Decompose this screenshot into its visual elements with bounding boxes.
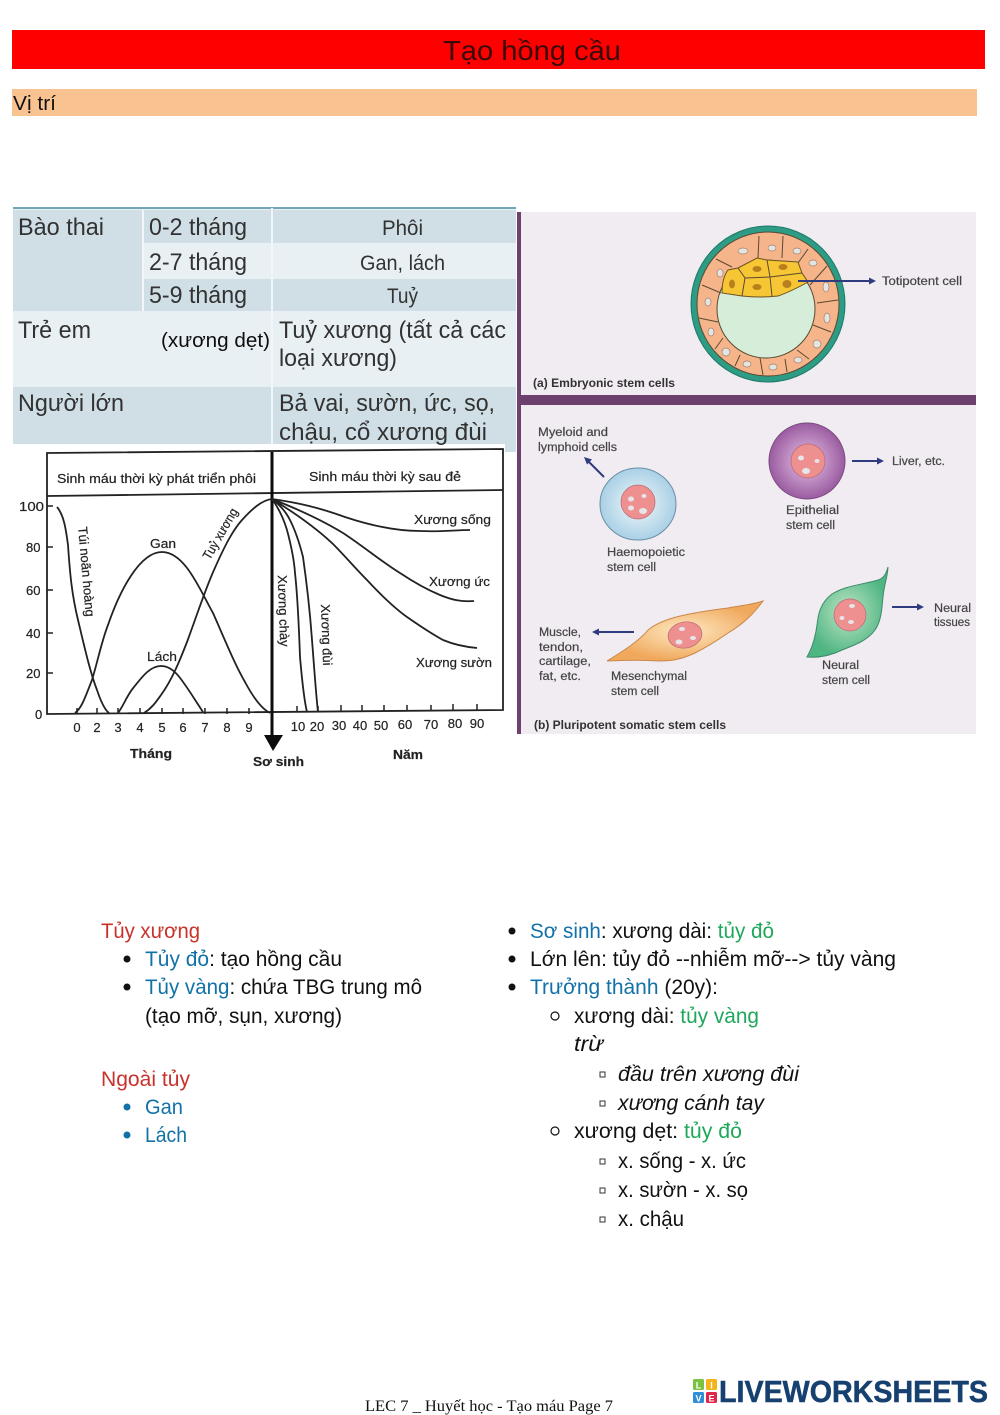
axis titles — [130, 746, 423, 769]
cell: haemopoietic: stem cell — [607, 562, 656, 574]
curve labels: Xương sống — [414, 512, 491, 527]
x axis ticks and labels: 0 — [73, 720, 81, 735]
x axis ticks and labels: 70 — [424, 717, 438, 732]
chart period headers: Sinh máu thời kỳ sau đẻ — [309, 469, 461, 484]
arrow: myeloid and lymphoid cells: Myeloid and — [538, 427, 608, 439]
notes: left column: Ngoài tủy — [101, 1068, 190, 1091]
caption a: (a) Embryonic stem cells — [533, 378, 675, 390]
x axis ticks and labels: 7 — [201, 720, 209, 735]
notes: right column: x. chậu — [618, 1208, 684, 1231]
x axis ticks and labels — [73, 704, 484, 735]
arrow: muscle, tendon, cartilage, fat — [539, 627, 634, 683]
x axis ticks and labels: 40 — [353, 718, 367, 733]
arrow: muscle, tendon, cartilage, fat: tendon, — [539, 642, 583, 654]
curve labels: Lách — [147, 649, 177, 664]
notes: right column: x. sườn - x. sọ — [618, 1179, 748, 1202]
table: blood formation sites by age: Người lớn — [18, 390, 124, 417]
cell: neural: Neural — [822, 660, 859, 672]
notes: left column: Tủy đỏ: tạo hồng cầu — [145, 948, 342, 971]
y axis ticks and labels: 100 — [19, 499, 44, 514]
x axis ticks and labels: 2 — [93, 720, 101, 735]
title bar — [12, 30, 985, 69]
notes: left column: Lách — [145, 1124, 187, 1147]
notes: right column: Lớn lên: tủy đỏ --nhiễm mỡ--> tủy vàng — [530, 948, 896, 971]
logo: liveworksheets: V — [695, 1394, 702, 1404]
chart period headers: Sinh máu thời kỳ phát triển phôi — [57, 471, 256, 486]
x axis ticks and labels: 5 — [158, 720, 166, 735]
diagram: embryonic blastocyst — [691, 226, 845, 382]
curve labels — [75, 505, 492, 670]
y axis ticks and labels: 80 — [26, 540, 40, 555]
section heading: Vị trí — [12, 89, 977, 116]
x axis ticks and labels: 90 — [470, 716, 484, 731]
x axis ticks and labels: 6 — [179, 720, 187, 735]
curve labels: Xương sườn — [416, 655, 492, 670]
curve labels: Tuỷ xương — [199, 505, 241, 562]
y axis ticks and labels: 60 — [26, 583, 40, 598]
cell: haemopoietic — [600, 468, 685, 574]
axis titles: Năm — [393, 747, 423, 762]
curves — [57, 499, 477, 713]
notes: right column: Sơ sinh: xương dài: tủy đỏ — [530, 920, 774, 943]
cell: epithelial: stem cell — [786, 520, 835, 532]
x axis ticks and labels: 50 — [374, 718, 388, 733]
notes: right column: xương dẹt: tủy đỏ — [574, 1120, 742, 1143]
y axis ticks and labels: 40 — [26, 626, 40, 641]
arrow: neural tissues: Neural — [934, 603, 971, 615]
line chart: haematopoiesis over development — [19, 449, 503, 769]
y axis ticks and labels — [19, 499, 53, 722]
notes: right column — [508, 920, 896, 1231]
arrow: muscle, tendon, cartilage, fat: fat, etc. — [539, 671, 581, 683]
notes: left column: Tủy xương — [101, 920, 200, 943]
table: blood formation sites by age: loại xương) — [279, 345, 397, 372]
y axis ticks and labels: 20 — [26, 666, 40, 681]
notes: left column — [101, 920, 422, 1147]
arrow: neural tissues: tissues — [934, 617, 970, 629]
arrow: totipotent cell — [798, 276, 962, 288]
footer text: LEC 7 _ Huyết học - Tạo máu Page 7 — [365, 1398, 613, 1415]
notes: right column: xương dài: tủy vàng — [574, 1005, 759, 1028]
table: blood formation sites by age: 5-9 tháng — [149, 282, 247, 309]
panel: stem cell diagrams — [517, 212, 976, 734]
table: blood formation sites by age: chậu, cổ xương đùi — [279, 419, 487, 446]
notes: right column: đầu trên xương đùi — [618, 1063, 800, 1086]
x axis ticks and labels: 60 — [398, 717, 412, 732]
table: blood formation sites by age: Bả vai, sườn, ức, sọ, — [279, 390, 495, 417]
x axis ticks and labels: 10 — [291, 719, 305, 734]
x axis ticks and labels: 20 — [310, 719, 324, 734]
table: blood formation sites by age: Phôi — [382, 217, 423, 240]
curve labels: Xương đùi — [318, 604, 335, 666]
x axis ticks and labels: 3 — [114, 720, 122, 735]
table: blood formation sites by age: Tuỷ — [387, 285, 418, 308]
x axis ticks and labels: 8 — [223, 720, 231, 735]
arrow: neural tissues — [892, 603, 971, 629]
table: blood formation sites by age: (xương dẹt) — [161, 330, 270, 352]
curve labels: Xương ức — [429, 574, 491, 589]
cell: mesenchymal: Mesenchymal — [611, 671, 687, 683]
y axis ticks and labels: 0 — [35, 707, 42, 722]
notes: right column: x. sống - x. ức — [618, 1150, 746, 1173]
arrow: liver: Liver, etc. — [892, 456, 945, 468]
arrow: myeloid and lymphoid cells: lymphoid cells — [538, 442, 617, 454]
arrow: myeloid and lymphoid cells — [538, 427, 617, 477]
table: blood formation sites by age: Gan, lách — [360, 252, 445, 275]
table: blood formation sites by age — [13, 207, 516, 452]
table: blood formation sites by age: 0-2 tháng — [149, 214, 247, 241]
cell: haemopoietic: Haemopoietic — [607, 547, 685, 559]
table: blood formation sites by age: Bào thai — [18, 214, 104, 241]
arrow: muscle, tendon, cartilage, fat: cartilage, — [539, 656, 591, 668]
notes: left column: Gan — [145, 1096, 183, 1119]
logo: liveworksheets: L — [696, 1380, 702, 1390]
x axis ticks and labels: 9 — [245, 720, 253, 735]
curve labels: Túi noãn hoàng — [75, 526, 98, 617]
notes: right column: trừ — [574, 1033, 605, 1056]
logo: liveworksheets: I — [710, 1380, 713, 1390]
chart period headers — [57, 469, 461, 486]
section heading: Vị trí: Vị trí — [13, 93, 56, 115]
logo: liveworksheets: E — [708, 1394, 715, 1404]
table: blood formation sites by age: 2-7 tháng — [149, 249, 247, 276]
arrow: liver — [852, 456, 945, 468]
curve labels: Gan — [150, 536, 176, 551]
cell: epithelial — [769, 423, 845, 532]
x axis ticks and labels: 4 — [136, 720, 144, 735]
axis titles: Tháng — [130, 746, 172, 761]
x axis ticks and labels: 30 — [332, 718, 346, 733]
arrow: totipotent cell: Totipotent cell — [882, 276, 962, 288]
title bar: Tạo hồng cầu — [443, 35, 621, 66]
x axis ticks and labels: 80 — [448, 716, 462, 731]
cell: mesenchymal — [607, 601, 763, 698]
curve labels: Xương chày — [275, 575, 292, 647]
table: blood formation sites by age: Tuỷ xương (tất cả các — [279, 317, 506, 344]
newborn arrow — [264, 735, 283, 751]
notes: left column: Tủy vàng: chứa TBG trung mô — [145, 976, 422, 999]
axis titles: Sơ sinh — [253, 754, 304, 769]
notes: right column: Trưởng thành (20y): — [530, 976, 718, 999]
cell: mesenchymal: stem cell — [611, 686, 659, 698]
table: blood formation sites by age: Trẻ em — [18, 317, 91, 344]
cell: epithelial: Epithelial — [786, 505, 839, 517]
cell: neural — [807, 567, 888, 687]
caption b: (b) Pluripotent somatic stem cells — [534, 720, 726, 732]
notes: left column: (tạo mỡ, sụn, xương) — [145, 1005, 342, 1028]
notes: right column: xương cánh tay — [617, 1092, 765, 1115]
cell: neural: stem cell — [822, 675, 870, 687]
arrow: muscle, tendon, cartilage, fat: Muscle, — [539, 627, 581, 639]
